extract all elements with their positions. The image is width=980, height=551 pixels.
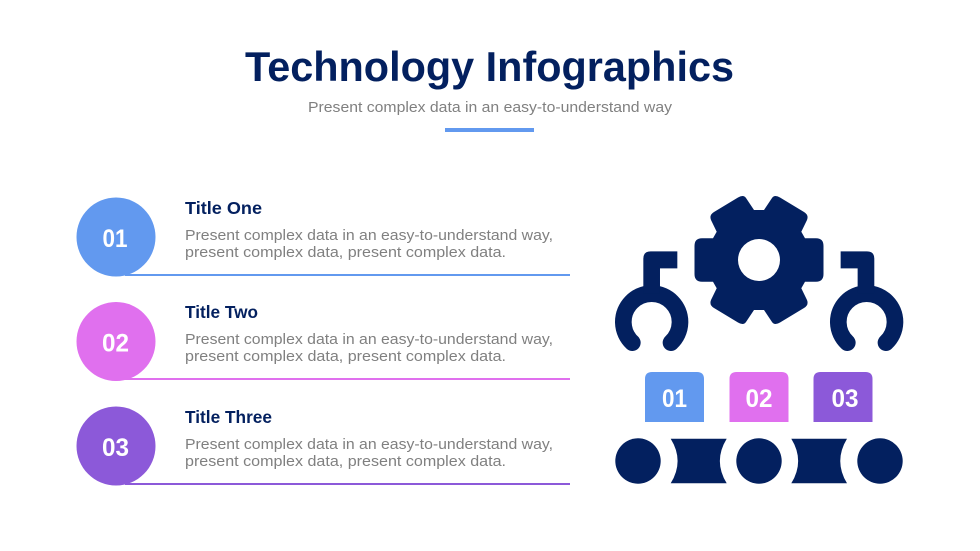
body one (185, 227, 553, 261)
tag 03 (814, 372, 872, 422)
underline two (125, 378, 570, 380)
underline three (125, 483, 570, 485)
icon: factory machine (615, 196, 903, 484)
body three (185, 436, 553, 470)
tag 01: 01 (662, 385, 687, 413)
heading two: Title Two (185, 302, 258, 322)
panel: item one (76, 198, 570, 276)
body two: present complex data, present complex data. (185, 348, 506, 365)
tag 01 (645, 372, 704, 422)
tag 02 (730, 372, 788, 422)
icon: right claw (838, 251, 895, 343)
subtitle: Present complex data in an easy-to-understand way (308, 99, 673, 116)
badge two (76, 302, 156, 381)
body one: Present complex data in an easy-to-understand way, (185, 227, 553, 244)
badge one (76, 198, 156, 276)
body one: present complex data, present complex data. (185, 244, 506, 261)
badge three: 03 (102, 434, 129, 462)
panel: item three (76, 406, 570, 486)
panel: item two (76, 302, 570, 381)
icon: gear (694, 196, 824, 324)
tag 02: 02 (746, 385, 772, 413)
badge one: 01 (102, 225, 128, 253)
title: Technology Infographics (245, 43, 734, 90)
conveyor belt (615, 438, 903, 484)
body three: present complex data, present complex data. (185, 453, 506, 470)
icon: left claw (623, 251, 680, 343)
underline one (125, 274, 570, 276)
body two: Present complex data in an easy-to-understand way, (185, 331, 553, 348)
heading three: Title Three (185, 407, 272, 427)
badge three (76, 406, 156, 486)
badge two: 02 (102, 330, 129, 358)
body three: Present complex data in an easy-to-understand way, (185, 436, 553, 453)
heading one: Title One (185, 198, 262, 218)
tag 03: 03 (832, 385, 858, 413)
body two (185, 331, 553, 365)
header divider (445, 128, 534, 132)
